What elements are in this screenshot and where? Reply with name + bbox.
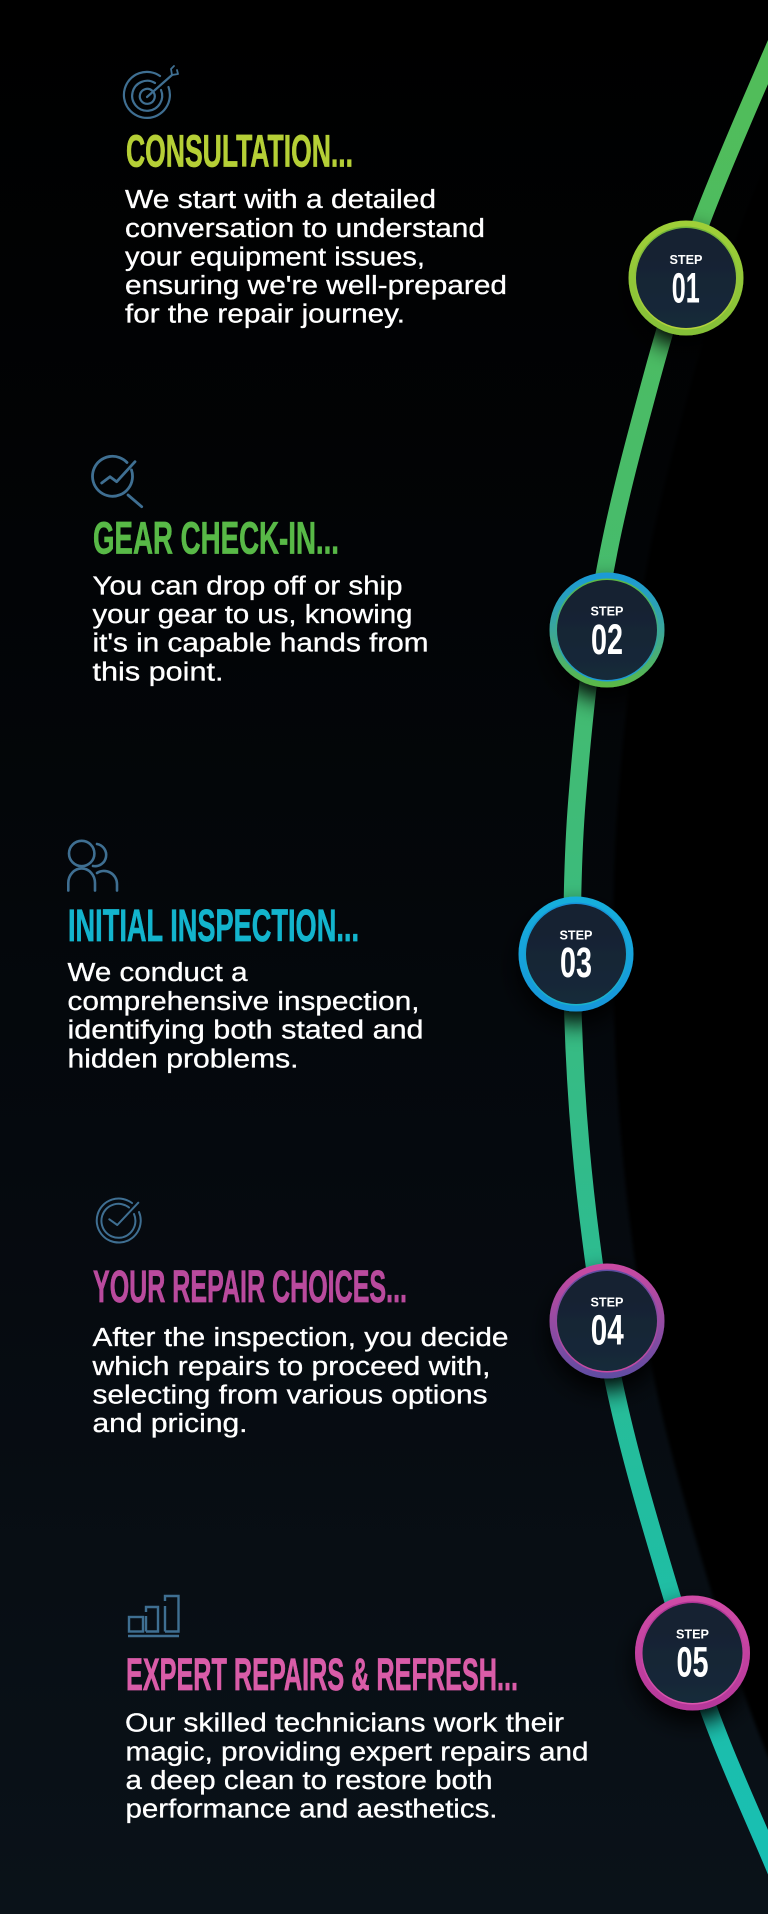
panel: gear check-in bbox=[92, 456, 428, 686]
panel: consultation bbox=[124, 66, 507, 328]
timeline curve bbox=[572, 32, 768, 1904]
icon: two people bbox=[68, 841, 117, 890]
text: your repair choices description: and pricing. bbox=[92, 1410, 248, 1438]
heading: your repair choices: YOUR REPAIR CHOICES... bbox=[93, 1261, 407, 1312]
step 03 badge: STEP bbox=[560, 928, 593, 942]
heading: gear check-in: GEAR CHECK-IN... bbox=[93, 512, 339, 564]
step 02 badge: STEP bbox=[590, 604, 624, 618]
step 04 badge: 04 bbox=[591, 1306, 624, 1354]
text: expert repairs and refresh description: magic, providing expert repairs and bbox=[126, 1738, 588, 1766]
text: consultation description: your equipment issues, bbox=[125, 244, 425, 272]
text: consultation description: conversation to understand bbox=[125, 215, 485, 243]
text: expert repairs and refresh description bbox=[125, 1710, 588, 1824]
text: initial inspection description: hidden problems. bbox=[68, 1046, 298, 1074]
text: gear check-in description: it's in capable hands from bbox=[92, 630, 428, 658]
step 05 badge: STEP bbox=[676, 1626, 709, 1642]
icon: bar chart bbox=[128, 1596, 179, 1636]
step 05 badge bbox=[635, 1596, 750, 1710]
step 02 badge bbox=[550, 572, 664, 688]
step 01 badge: 01 bbox=[672, 264, 700, 312]
panel: your repair choices bbox=[91, 1199, 509, 1438]
step 04 badge: STEP bbox=[590, 1294, 624, 1310]
heading: initial inspection: INITIAL INSPECTION... bbox=[68, 900, 359, 951]
icon: magnifier with chart bbox=[93, 456, 142, 507]
text: consultation description: ensuring we're well-prepared bbox=[125, 272, 507, 300]
text: initial inspection description bbox=[68, 959, 424, 1074]
curved background shade bbox=[613, 62, 768, 1852]
text: initial inspection description: comprehensive inspection, bbox=[68, 988, 420, 1016]
step 05 badge: 05 bbox=[676, 1638, 708, 1686]
text: gear check-in description: this point. bbox=[92, 658, 224, 686]
text: initial inspection description: identifying both stated and bbox=[68, 1016, 424, 1044]
text: gear check-in description bbox=[92, 572, 428, 686]
step 03 badge bbox=[518, 896, 634, 1012]
icon: check circle bbox=[97, 1199, 141, 1243]
step 01 badge: STEP bbox=[670, 252, 703, 267]
text: consultation description bbox=[125, 186, 507, 328]
text: your repair choices description: After the inspection, you decide bbox=[92, 1324, 508, 1352]
text: your repair choices description bbox=[91, 1324, 509, 1438]
text: gear check-in description: your gear to us, knowing bbox=[92, 601, 412, 629]
text: consultation description: for the repair journey. bbox=[125, 300, 405, 328]
icon: target bbox=[124, 66, 178, 118]
step 01 badge bbox=[628, 220, 744, 336]
heading: consultation: CONSULTATION... bbox=[126, 126, 353, 176]
text: initial inspection description: We conduct a bbox=[68, 959, 248, 987]
text: expert repairs and refresh description: performance and aesthetics. bbox=[126, 1796, 498, 1824]
panel: expert repairs and refresh bbox=[125, 1596, 588, 1824]
text: gear check-in description: You can drop off or ship bbox=[92, 572, 402, 600]
text: your repair choices description: which repairs to proceed with, bbox=[91, 1353, 491, 1381]
step 02 badge: 02 bbox=[591, 616, 623, 664]
text: expert repairs and refresh description: Our skilled technicians work their bbox=[125, 1710, 565, 1738]
text: consultation description: We start with a detailed bbox=[125, 186, 436, 214]
step 03 badge: 03 bbox=[560, 939, 592, 987]
step 04 badge bbox=[550, 1264, 664, 1378]
text: your repair choices description: selecting from various options bbox=[92, 1382, 488, 1410]
panel: initial inspection bbox=[68, 841, 424, 1074]
text: expert repairs and refresh description: a deep clean to restore both bbox=[126, 1767, 492, 1795]
